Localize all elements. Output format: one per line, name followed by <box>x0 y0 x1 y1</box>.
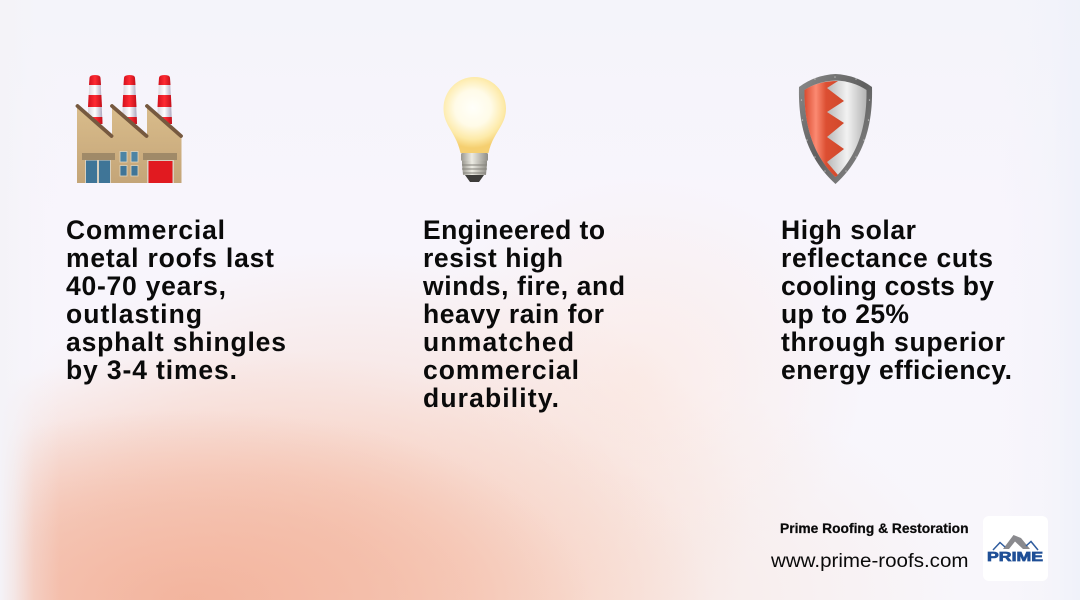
text block: column two: winds, fire, and <box>422 271 625 301</box>
logo: Prime: PRIME <box>987 549 1043 564</box>
text block: column one: outlasting <box>66 299 202 329</box>
footer: company name and website: www.prime-roofs.com <box>770 551 968 572</box>
text block: column two: heavy rain for <box>423 299 604 329</box>
text block: column two: unmatched <box>423 327 574 357</box>
text block: column two: resist high <box>423 243 563 273</box>
text block: column one: 40-70 years, <box>66 271 226 301</box>
text block: column one: by 3-4 times. <box>66 355 237 385</box>
text block: column three: reflectance cuts <box>781 243 993 273</box>
text block: column one: Commercial <box>66 215 225 245</box>
text block: column one: asphalt shingles <box>66 327 286 357</box>
text block: column one: metal roofs last <box>66 243 274 273</box>
text block: column three: energy efficiency. <box>781 355 1012 385</box>
text block: column three: up to 25% <box>781 299 909 329</box>
text block: column two: Engineered to <box>423 215 605 245</box>
text block: column three: cooling costs by <box>781 271 994 301</box>
text block: column three: High solar <box>781 215 916 245</box>
text block: column two: commercial <box>423 355 579 385</box>
footer: company name and website: Prime Roofing & Restoration <box>780 521 968 536</box>
text block: column two: durability. <box>423 383 559 413</box>
text block: column three: through superior <box>781 327 1005 357</box>
